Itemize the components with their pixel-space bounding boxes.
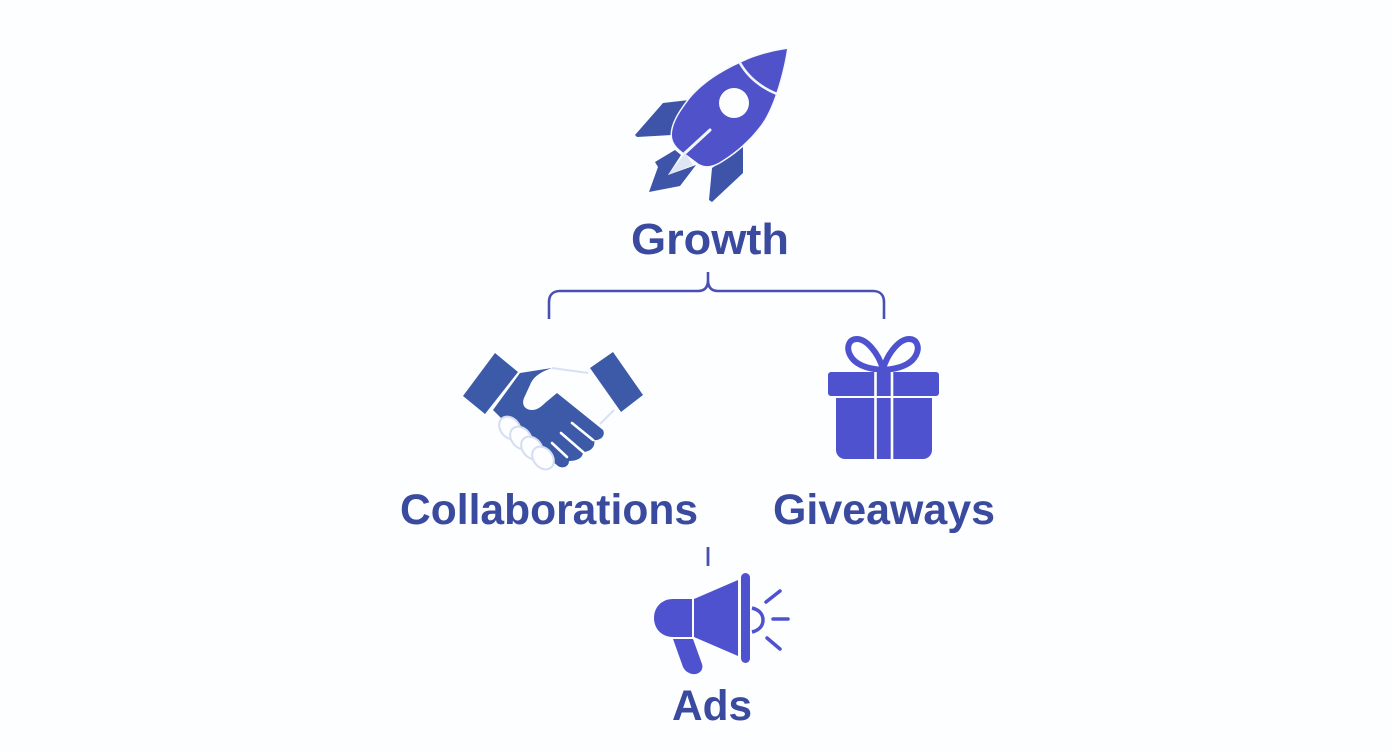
label: Collaborations: Collaborations (400, 486, 698, 534)
icon: rocket (635, 49, 787, 202)
connector tick (707, 547, 709, 566)
icon: gift box (828, 339, 939, 459)
label: Ads: Ads (672, 682, 752, 730)
bracket connector (549, 272, 884, 319)
icon: megaphone (654, 573, 788, 674)
label: Giveaways: Giveaways (773, 486, 995, 534)
heading: Growth: Growth (631, 215, 789, 264)
icon: handshake (463, 352, 643, 474)
